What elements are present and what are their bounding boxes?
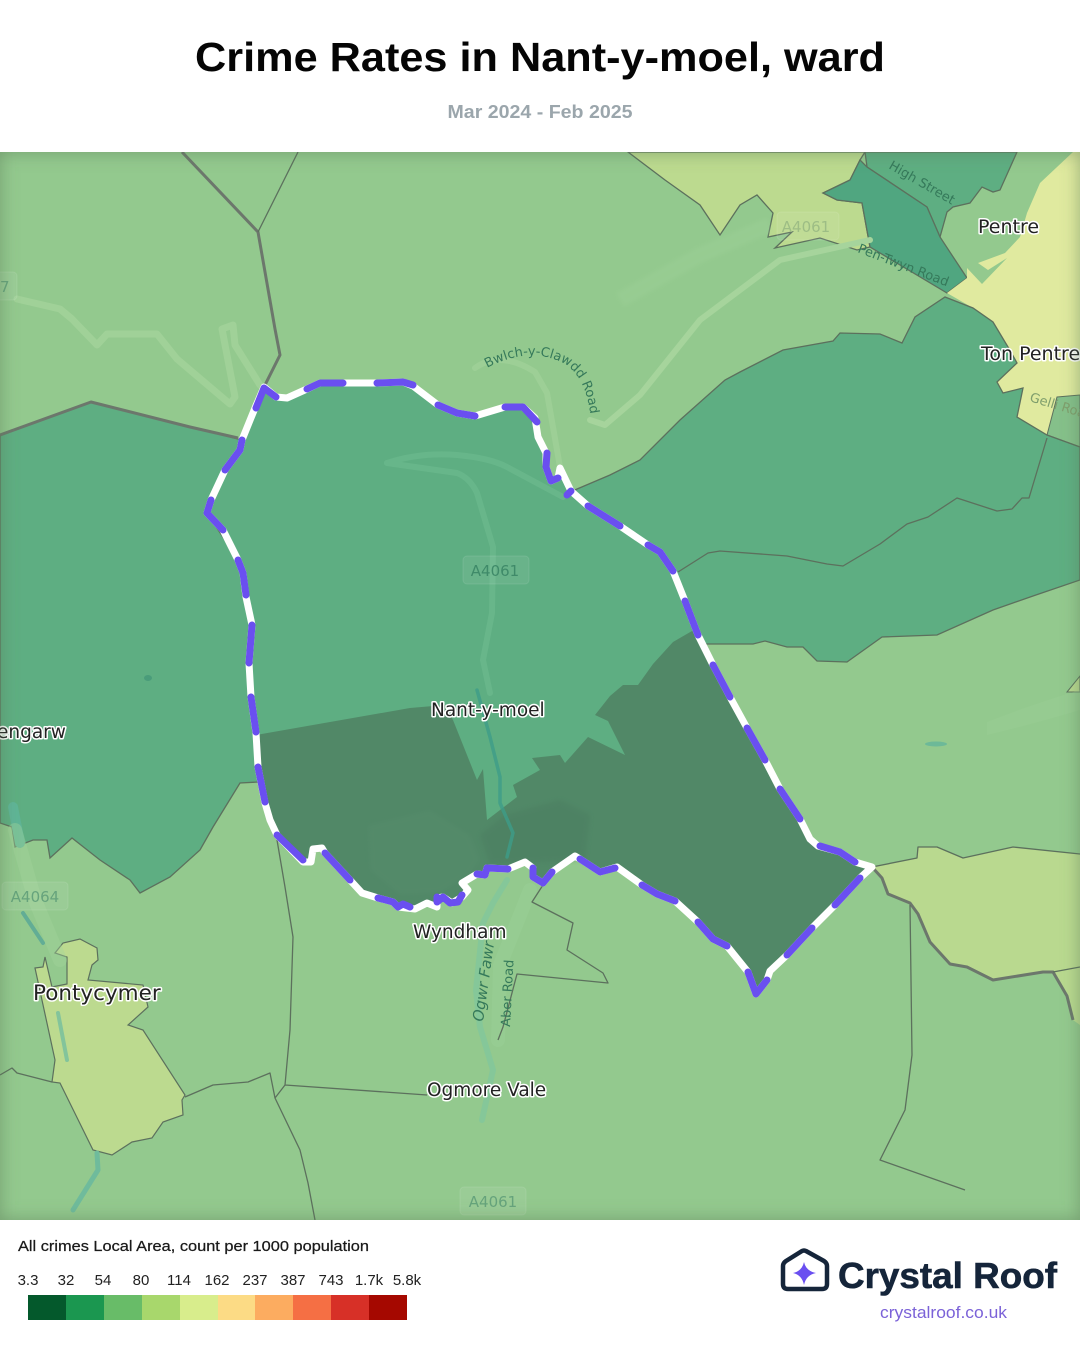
ward tonal patches [368, 810, 480, 895]
legend values [18, 1272, 422, 1289]
legend values: 237 [242, 1272, 268, 1289]
legend values: 1.7k [355, 1272, 384, 1289]
place labels [0, 216, 1080, 1101]
place labels: Ogmore Vale [427, 1080, 546, 1101]
region: upper right green [865, 152, 1017, 237]
road names: High Street [886, 158, 957, 208]
road shields [0, 212, 839, 1215]
place labels: Pentre [978, 216, 1039, 238]
legend values: 743 [318, 1272, 344, 1289]
ward roads [387, 454, 563, 693]
region: top right pale area [628, 152, 870, 250]
legend values: 5.8k [393, 1272, 422, 1289]
icon: house with star [783, 1250, 827, 1289]
place labels: Ton Pentre [980, 343, 1080, 365]
logo [783, 1250, 1058, 1322]
legend values: 54 [95, 1272, 111, 1289]
legend values: 3.3 [18, 1272, 38, 1289]
road shields: A4061 [782, 218, 830, 236]
ward boundary purple dashes [207, 382, 860, 994]
place labels: Pontycymer [33, 981, 161, 1006]
thin district lines [0, 152, 1080, 1220]
ward boundary white [207, 382, 872, 994]
boundary lines [0, 152, 280, 438]
legend values: 114 [167, 1272, 191, 1289]
river and wide roads [13, 240, 870, 1210]
ward area: Nant-y-moel medium green [211, 386, 693, 820]
legend [18, 1238, 422, 1320]
road names: Bwlch-y-Clawdd Road [484, 347, 600, 413]
legend values: 387 [280, 1272, 306, 1289]
legend values: 32 [58, 1272, 74, 1289]
legend title: All crimes Local Area, count per 1000 population [18, 1238, 369, 1255]
legend colour scale [28, 1295, 407, 1320]
road names: Aber Road [499, 959, 518, 1027]
website: crystalroof.co.uk [880, 1303, 1008, 1322]
road shields: A4064 [11, 888, 59, 906]
road names: Ogwr Fawr [469, 939, 498, 1023]
legend values: 162 [204, 1272, 230, 1289]
region: teal centre of top right [823, 160, 967, 293]
ward area: darker southern section [256, 631, 872, 994]
place labels: Nant-y-moel [431, 700, 545, 721]
lakes and light patches [144, 225, 1080, 746]
legend values: 80 [133, 1272, 149, 1289]
place labels: Wyndham [413, 922, 506, 943]
road shields: 7 [0, 278, 10, 296]
region: right medium green [570, 297, 1080, 662]
region: Pontycymer pale [35, 939, 185, 1155]
region: left medium green [0, 402, 258, 893]
road shields: A4061 [469, 1193, 517, 1211]
road names [472, 160, 1080, 1027]
title: Crime Rates in Nant-y-moel, ward [195, 34, 885, 80]
region: lower right pale [872, 847, 1080, 980]
road shields: A4061 [471, 562, 519, 580]
subtitle: date range: Mar 2024 - Feb 2025 [448, 101, 632, 122]
region: Pentre pale yellow [947, 152, 1080, 435]
road names: Pen-Twyn Road [856, 242, 951, 290]
region: Gelli strip [1047, 395, 1080, 447]
logo wordmark: Crystal Roof [838, 1255, 1058, 1296]
lower right boundary [872, 867, 1073, 1020]
